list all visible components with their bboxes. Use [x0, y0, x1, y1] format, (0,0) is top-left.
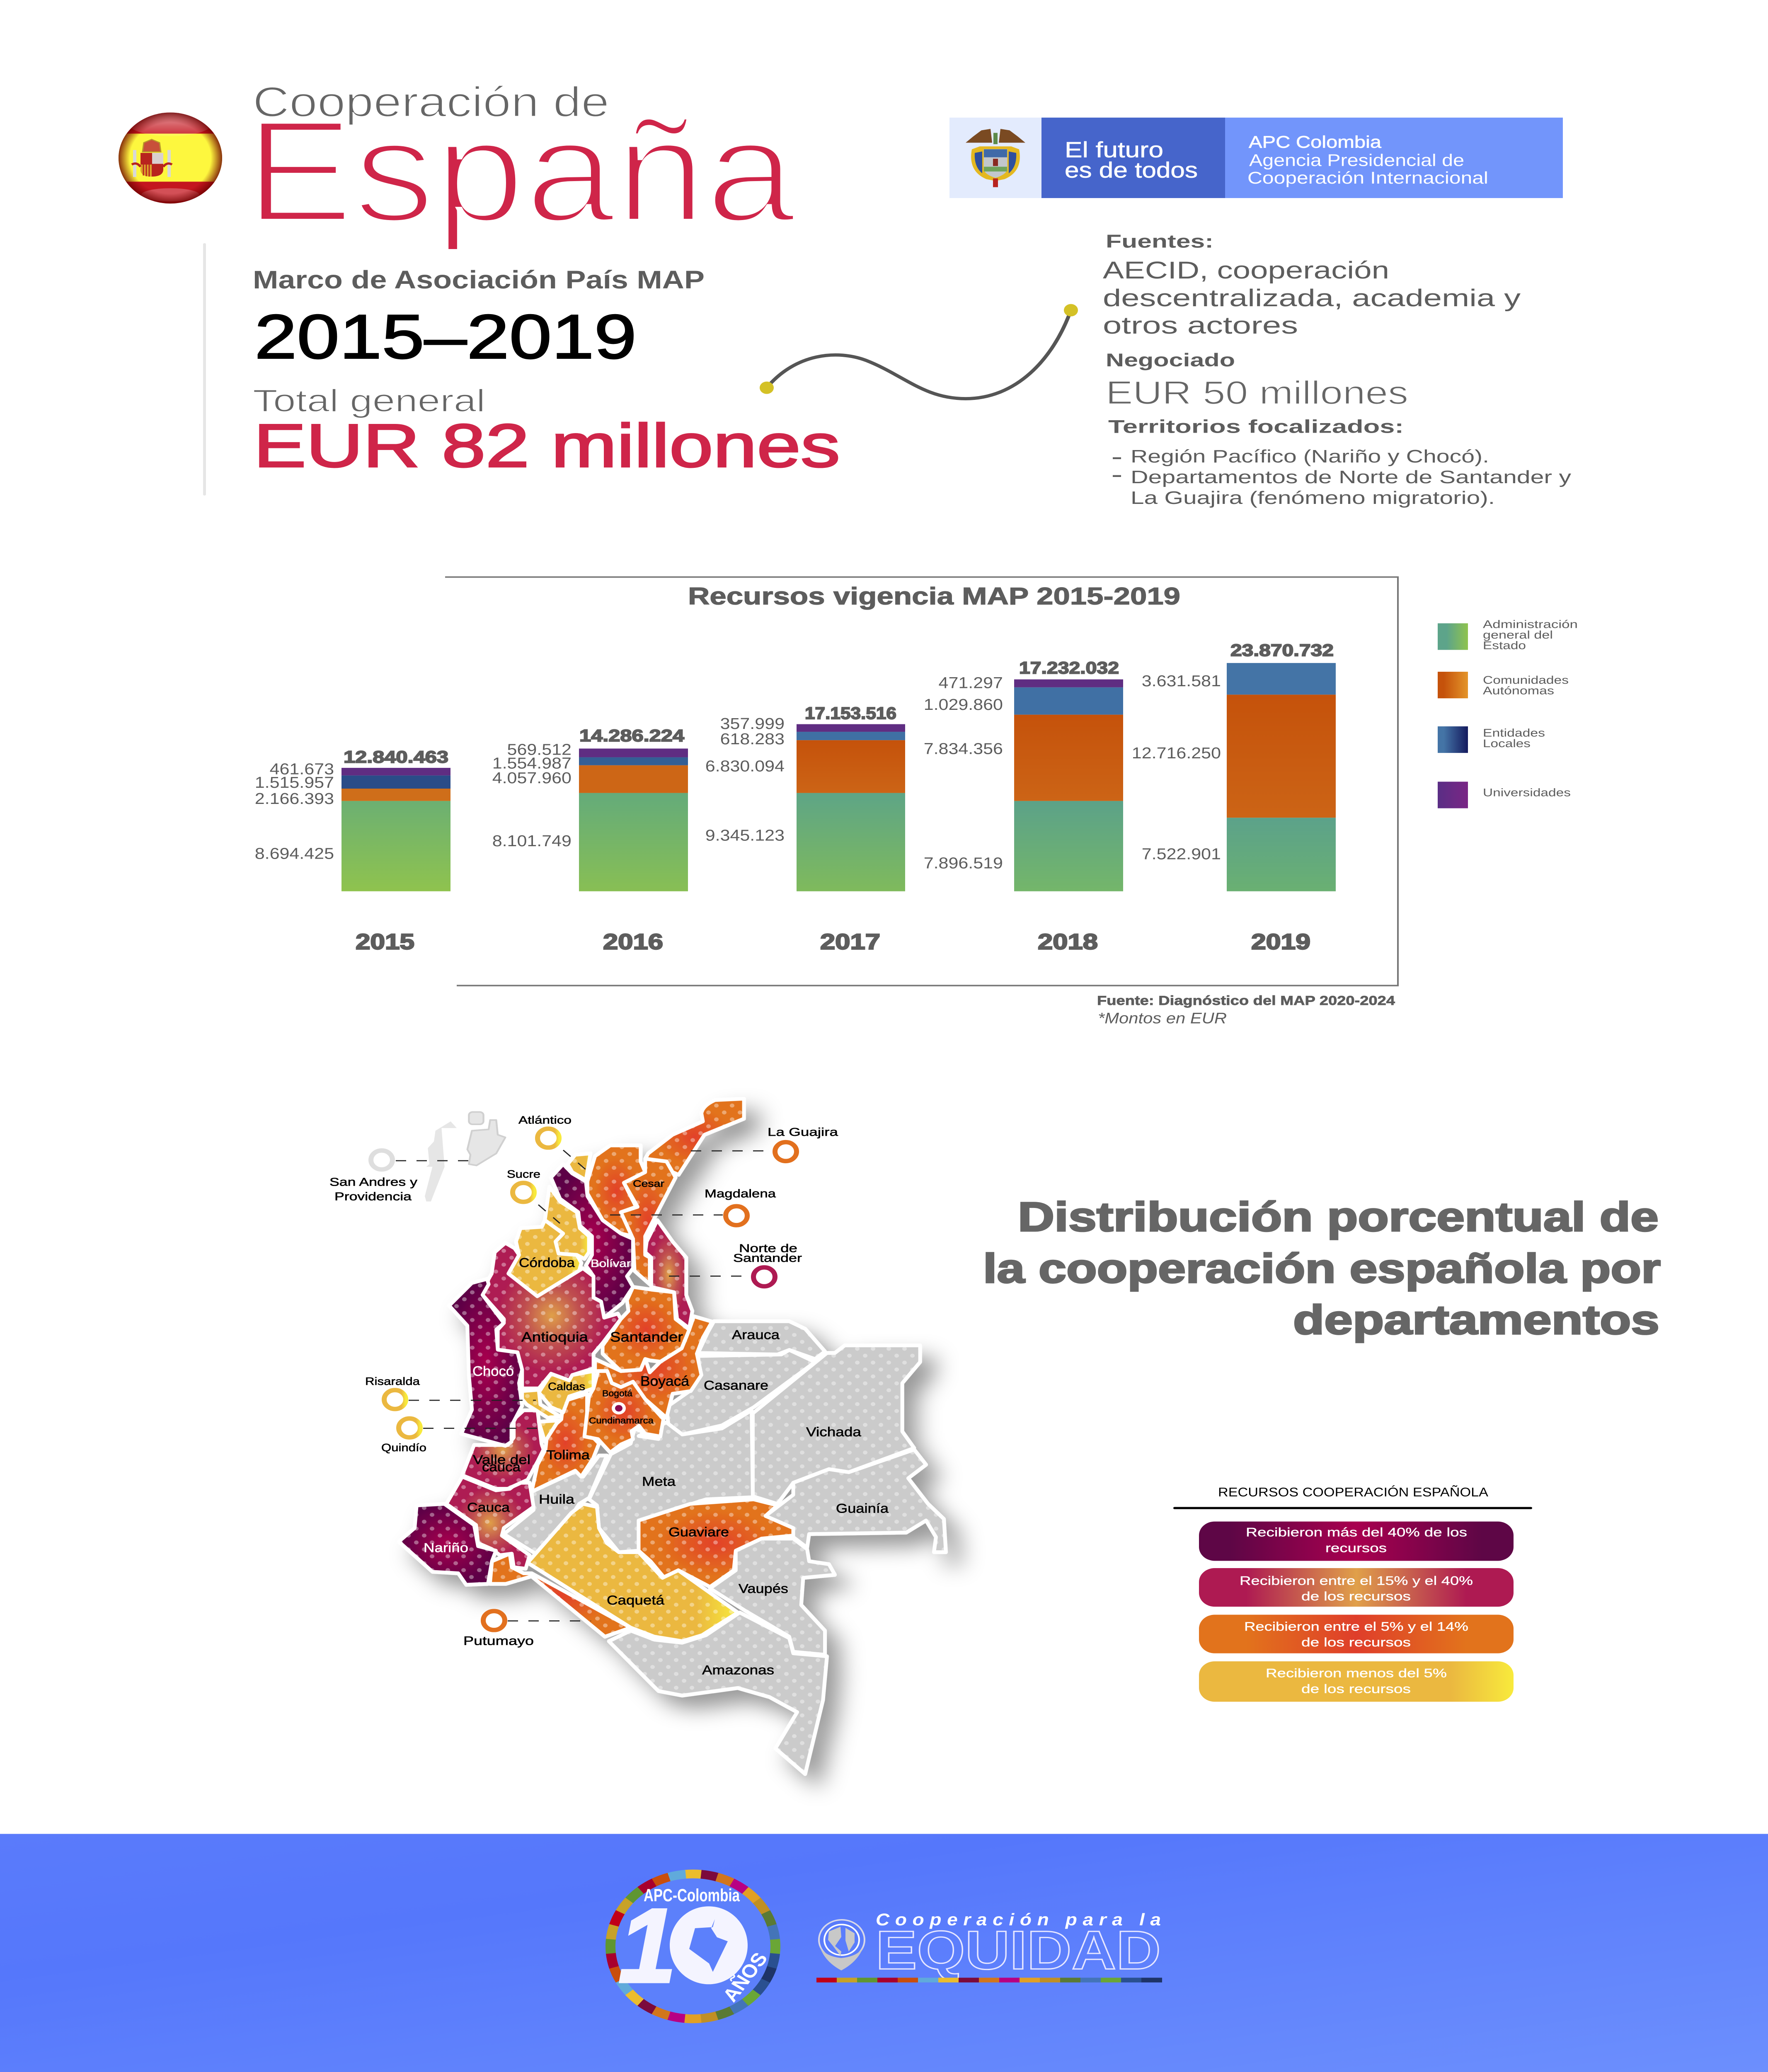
map labels inside: Huila [539, 1492, 574, 1507]
logo: Cooperación para la Equidad: EQUIDAD [876, 1920, 1161, 1980]
info block: fuentes: AECID, cooperación [1103, 257, 1389, 284]
map labels inside: Guainía [836, 1501, 889, 1516]
title: Cooperación de [253, 79, 609, 126]
heading: distribución: Distribución porcentual de [1018, 1194, 1659, 1240]
chart legend: Autónomas [1483, 685, 1554, 697]
agency name [1247, 133, 1488, 187]
dept: Antioquia [482, 1243, 621, 1388]
dept: Cesar [621, 1159, 676, 1284]
info block: negociado [1106, 350, 1408, 411]
map labels outside: Putumayo [463, 1634, 534, 1648]
dept: Vaupés [710, 1539, 835, 1655]
legend pill: menos del 5%: Recibieron menos del 5% [1266, 1666, 1447, 1680]
dept: Huila [504, 1455, 607, 1554]
bar 2019: 12.716.250 [1132, 744, 1221, 762]
chart title: Recursos vigencia MAP 2015-2019 [688, 583, 1180, 610]
dept: Sucre [545, 1187, 589, 1259]
vertical divider [203, 243, 206, 496]
legend pill: 5% a 14%: de los recursos [1301, 1635, 1411, 1649]
bar 2018: 2018 [1038, 929, 1098, 954]
bar 2018: 17.232.032 [1019, 659, 1119, 678]
legend pill: 5% a 14% [1199, 1615, 1514, 1653]
map labels inside: Vichada [806, 1425, 861, 1439]
map labels inside: Nariño [424, 1540, 468, 1555]
info block: territorios focalizados: Territorios focalizados: [1108, 416, 1404, 437]
info block: territorios focalizados: Departamentos de Norte de Santander y [1131, 467, 1572, 487]
info block: negociado: EUR 50 millones [1106, 374, 1408, 411]
slogan: es de todos [1065, 158, 1198, 182]
bar 2018: 471.297 [939, 674, 1003, 692]
map marker rings [371, 1129, 797, 1630]
bar 2019: 3.631.581 [1142, 672, 1221, 690]
bar 2019: 23.870.732 [1230, 641, 1334, 660]
dept: Chocó [449, 1279, 522, 1446]
logo: APC-Colombia 10 años: AÑOS [718, 1949, 772, 2005]
chart legend: general del [1483, 629, 1553, 641]
bar 2017: 2017 [820, 929, 880, 954]
dept: Córdoba [509, 1220, 581, 1296]
map labels inside: Cesar [633, 1179, 664, 1189]
dept: Santander [603, 1287, 689, 1371]
dept: Amazonas [609, 1612, 827, 1774]
chart legend: Locales [1483, 738, 1531, 750]
bar 2019 [1132, 641, 1336, 954]
map labels inside: Casanare [704, 1378, 768, 1393]
bar 2017 [705, 704, 905, 954]
total general label: Total general [253, 383, 485, 419]
dept: Norte de Santander [645, 1220, 692, 1328]
map of Colombia [399, 1099, 946, 1774]
map labels outside: Sucre [507, 1168, 540, 1180]
map labels inside: Boyacá [640, 1373, 689, 1389]
logo: APC-Colombia 10 años: 0 [671, 1886, 747, 2004]
slogan [1065, 138, 1198, 182]
bar 2016: 2016 [603, 929, 663, 954]
dept: Caquetá [528, 1504, 738, 1641]
chart legend: Entidades [1483, 727, 1545, 739]
bar 2019: 2019 [1251, 929, 1310, 954]
bar 2018: 1.029.860 [924, 696, 1003, 714]
info block: territorios focalizados: Región Pacífico (Nariño y Chocó). [1131, 446, 1489, 466]
bar 2018 [924, 659, 1123, 954]
map labels inside [424, 1179, 889, 1677]
bar 2016: 4.057.960 [492, 769, 572, 787]
chart legend: Universidades [1483, 787, 1571, 799]
icon: Colombia coat of arms [966, 129, 1025, 187]
legend pill: 5% a 14%: Recibieron entre el 5% y el 14% [1244, 1619, 1468, 1634]
map labels inside: Caldas [548, 1380, 585, 1392]
map labels inside: Vaupés [739, 1581, 788, 1596]
chart legend: Administración [1483, 618, 1578, 631]
map labels inside: Antioquia [521, 1329, 588, 1345]
bar 2015: 461.673 [270, 760, 334, 778]
map labels inside: Chocó [472, 1363, 514, 1379]
text block: marco de asociación: Marco de Asociación País MAP [253, 265, 705, 294]
map labels inside: Cundinamarca [589, 1416, 654, 1426]
bar 2015: 8.694.425 [255, 845, 334, 862]
heading: distribución: departamentos [1293, 1297, 1659, 1343]
map labels inside: Valle del [473, 1452, 530, 1467]
map labels inside: cauca [482, 1460, 521, 1474]
government banner [949, 118, 1563, 198]
map labels inside: Cauca [467, 1500, 510, 1515]
bar 2017: 17.153.516 [805, 704, 896, 723]
connector curve [760, 304, 1078, 399]
map labels outside: Risaralda [365, 1375, 420, 1387]
title: España [245, 90, 797, 253]
map labels outside: Santander [733, 1252, 802, 1265]
legend pill: más del 40%: recursos [1325, 1541, 1387, 1555]
map labels outside: San Andres y [329, 1176, 417, 1188]
bar 2015 [255, 748, 450, 954]
bar 2017: 618.283 [720, 730, 785, 748]
bar 2015: 1.515.957 [255, 774, 334, 792]
icon: Spain flag button [119, 113, 222, 204]
heading: distribución [983, 1194, 1661, 1343]
map labels outside: La Guajira [768, 1126, 838, 1139]
legend title: RECURSOS COOPERACIÓN ESPAÑOLA [1218, 1485, 1488, 1499]
map labels inside: Amazonas [702, 1663, 774, 1677]
chart legend [1438, 618, 1578, 808]
heading: distribución: la cooperación española por [983, 1246, 1661, 1292]
map labels inside: Córdoba [519, 1255, 575, 1270]
logo: Cooperación para la Equidad: Cooperación para la [876, 1910, 1161, 1929]
flag crest [132, 139, 172, 177]
dept: Atlántico [568, 1153, 591, 1180]
dept: Caldas [539, 1371, 593, 1412]
bar 2015: 2.166.393 [255, 789, 334, 807]
map labels inside: Caquetá [607, 1593, 664, 1607]
bar 2018: 7.834.356 [924, 740, 1003, 758]
period 2015–2019: 2015–2019 [254, 302, 637, 372]
stacked bar chart [255, 641, 1336, 954]
dept: Tolima [532, 1394, 599, 1492]
info block: territorios focalizados [1108, 416, 1572, 508]
dept: La Guajira [645, 1099, 744, 1175]
chart source note: Fuente: Diagnóstico del MAP 2020-2024 [1097, 993, 1395, 1008]
logo: APC-Colombia 10 años [603, 1867, 783, 2026]
info block: negociado: Negociado [1106, 350, 1235, 370]
info block: fuentes: descentralizada, academia y [1103, 285, 1521, 312]
dept: Casanare [666, 1350, 815, 1435]
map labels outside: Atlántico [518, 1113, 572, 1126]
logo: APC-Colombia 10 años: 1 [618, 1886, 676, 2004]
dept: Quindío [539, 1421, 559, 1442]
chart source note [1097, 993, 1395, 1027]
chart frame [445, 577, 1398, 985]
map labels inside: Santander [610, 1329, 683, 1345]
dept: Arauca [698, 1321, 825, 1359]
chart legend: Comunidades [1483, 674, 1569, 687]
Bogotá marker [612, 1402, 626, 1414]
islands San Andrés y Providencia [425, 1112, 505, 1201]
map labels outside [329, 1113, 838, 1648]
dept: Putumayo [490, 1554, 631, 1636]
map labels outside: Providencia [334, 1190, 412, 1203]
bar 2017: 357.999 [720, 714, 785, 732]
map labels inside: Arauca [732, 1327, 780, 1342]
bar 2016: 8.101.749 [492, 832, 572, 850]
dept: Guainía [765, 1450, 946, 1552]
bar 2015: 2015 [356, 929, 414, 954]
map labels outside: Magdalena [705, 1187, 776, 1200]
dept: Magdalena [587, 1145, 645, 1236]
dept: Nariño [399, 1504, 496, 1585]
bar 2018: 7.896.519 [924, 854, 1003, 872]
info block: fuentes: otros actores [1103, 312, 1298, 339]
icon: globe and hands [819, 1920, 865, 1970]
bar 2017: 6.830.094 [705, 757, 785, 775]
footer band [0, 1834, 1768, 2072]
color bar [816, 1978, 1162, 1982]
slogan: El futuro [1065, 138, 1163, 162]
dept: Meta [589, 1410, 753, 1552]
bar 2015: 12.840.463 [344, 748, 448, 767]
total general value: EUR 82 millones [254, 411, 840, 480]
info block: fuentes: Fuentes: [1106, 231, 1213, 252]
map labels inside: Tolima [546, 1447, 590, 1462]
info block: fuentes [1103, 231, 1521, 339]
legend pill: más del 40%: Recibieron más del 40% de los [1246, 1525, 1467, 1539]
chart legend: Estado [1483, 639, 1526, 652]
dept: Bolívar [551, 1164, 633, 1318]
map labels inside: Bolívar [591, 1257, 631, 1269]
legend pill: menos del 5%: de los recursos [1301, 1682, 1411, 1696]
dept: Cauca [446, 1477, 533, 1569]
chart source note: *Montos en EUR [1098, 1010, 1227, 1027]
bar 2016 [492, 726, 688, 954]
dept: Valle del Cauca [462, 1410, 543, 1489]
map labels inside: Guaviare [668, 1525, 729, 1539]
legend pill: 15% a 40% [1199, 1568, 1514, 1607]
agency name: APC Colombia [1249, 133, 1382, 152]
logo colored ring [603, 1867, 783, 2026]
bar 2016: 569.512 [507, 741, 572, 758]
legend pill: más del 40% [1199, 1522, 1514, 1561]
map leader lines [396, 1150, 773, 1621]
info block: territorios focalizados: La Guajira (fenómeno migratorio). [1131, 487, 1495, 508]
agency name: Agencia Presidencial de [1249, 151, 1464, 170]
map labels inside: Meta [642, 1474, 676, 1489]
legend pill: menos del 5% [1199, 1661, 1514, 1702]
bar 2017: 9.345.123 [705, 826, 785, 844]
dept: Risaralda [522, 1390, 560, 1418]
bar 2016: 14.286.224 [579, 726, 684, 745]
map labels outside: Quindío [381, 1441, 426, 1454]
legend pill: 15% a 40%: Recibieron entre el 15% y el 40% [1240, 1573, 1473, 1588]
dept: Vichada [753, 1346, 920, 1504]
dept: Cundinamarca [584, 1371, 664, 1452]
map labels inside: Bogotá [602, 1389, 632, 1398]
dept: Boyacá [595, 1316, 712, 1418]
legend pill: 15% a 40%: de los recursos [1301, 1589, 1411, 1603]
agency name: Cooperación Internacional [1247, 169, 1488, 187]
logo: APC-Colombia 10 años: APC-Colombia [644, 1886, 740, 1905]
bar 2016: 1.554.987 [492, 754, 572, 772]
map legend [1173, 1485, 1532, 1702]
dept: Guaviare [639, 1499, 793, 1587]
bar 2019: 7.522.901 [1142, 845, 1221, 863]
map labels outside: Norte de [739, 1242, 797, 1255]
